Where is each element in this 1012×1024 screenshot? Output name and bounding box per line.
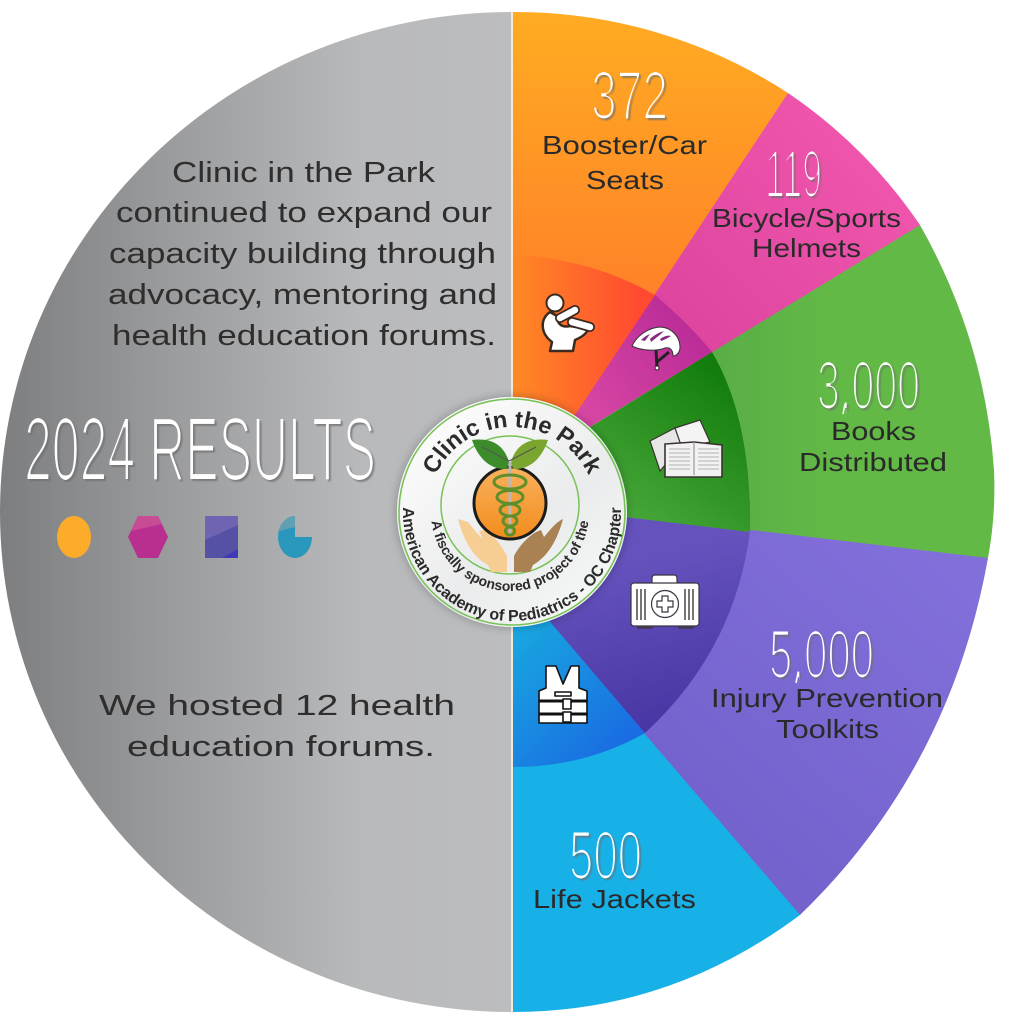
heading: 2024 results: 2024 RESULTS [24, 400, 376, 500]
stat: 5,000 toolkits: 5,000 [769, 616, 874, 693]
inner wedge: helmets [555, 295, 712, 439]
stat: 500 life jackets [533, 817, 696, 914]
stat: 372 booster seats: Booster/Car [542, 130, 707, 160]
stat: 5,000 toolkits [711, 616, 943, 744]
icon: car seat [543, 294, 590, 351]
inner wedge: books [570, 352, 750, 532]
logo leaves [472, 440, 548, 469]
body text: forums: We hosted 12 health [99, 690, 455, 722]
icon: first aid kit [631, 575, 699, 628]
body text: forums [99, 690, 455, 763]
inner wedge: booster seats [513, 255, 655, 512]
body text: capacity building: Clinic in the Park [172, 157, 436, 189]
body text: capacity building: advocacy, mentoring and [108, 279, 497, 311]
icon: life jacket [539, 666, 587, 723]
legend: hexagon [128, 516, 168, 558]
stat: 372 booster seats [542, 57, 707, 195]
slice: life jackets [513, 600, 800, 1012]
legend: pie [278, 516, 312, 558]
body text: capacity building: health education forums. [112, 320, 496, 352]
stat: 3,000 books [799, 347, 947, 477]
icon: helmet [632, 327, 680, 370]
slice: helmets [555, 93, 920, 436]
stat: 372 booster seats: Seats [586, 165, 664, 195]
stat: 119 helmets: 119 [765, 137, 822, 212]
legend: circle [57, 516, 91, 558]
icon: books [650, 420, 722, 477]
legend shapes [57, 516, 312, 558]
stat: 3,000 books: 3,000 [817, 347, 920, 424]
stat: 5,000 toolkits: Toolkits [776, 714, 879, 744]
slice: booster seats [513, 12, 788, 512]
body text: forums: education forums. [127, 731, 435, 763]
inner wedge: toolkits [540, 500, 750, 733]
stat: 3,000 books: Distributed [799, 447, 947, 477]
stat: 119 helmets: Bicycle/Sports [712, 203, 901, 233]
stat: 372 booster seats: 372 [591, 57, 668, 134]
logo orange [474, 467, 546, 539]
logo caduceus [494, 462, 526, 535]
body text: capacity building [108, 157, 497, 352]
logo badge [392, 392, 632, 632]
logo subtitle: A fiscally sponsored project of the [432, 521, 588, 591]
logo organisation: American Academy of Pediatrics - OC Chapter [403, 508, 622, 622]
body text: capacity building: continued to expand our [116, 197, 492, 229]
stat: 119 helmets [712, 137, 901, 263]
stat: 5,000 toolkits: Injury Prevention [711, 683, 943, 713]
stat: 500 life jackets: Life Jackets [533, 884, 696, 914]
body text: capacity building: capacity building through [109, 238, 496, 270]
inner wedge: life jackets [513, 610, 645, 767]
logo title: Clinic in the Park [424, 411, 600, 476]
divider line [511, 12, 513, 1012]
panel: grey half circle [0, 12, 512, 1012]
slice: books [560, 200, 994, 558]
legend: square [205, 516, 238, 558]
logo hands [458, 519, 563, 572]
stat: 500 life jackets: 500 [569, 817, 642, 894]
slice: toolkits [530, 480, 988, 915]
stat: 119 helmets: Helmets [752, 233, 861, 263]
stat: 3,000 books: Books [831, 416, 916, 446]
